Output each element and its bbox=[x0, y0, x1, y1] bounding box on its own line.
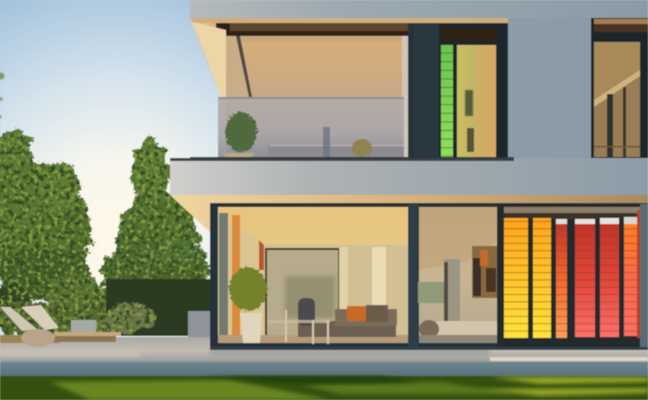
orange cushion bbox=[347, 306, 366, 321]
top light band bbox=[190, 18, 508, 23]
living room left pane bbox=[218, 207, 408, 344]
small window bbox=[418, 282, 444, 303]
room wall bbox=[226, 36, 408, 158]
dark column bbox=[408, 23, 440, 158]
tree: right slender bbox=[102, 140, 208, 284]
round ottoman bbox=[21, 329, 55, 347]
recess top bbox=[216, 23, 414, 36]
lounger back rests bbox=[0, 307, 37, 331]
upper sill bbox=[190, 157, 514, 161]
planter large bbox=[188, 311, 210, 338]
hedge bbox=[106, 279, 210, 336]
side glass door bbox=[219, 213, 228, 341]
left curtain wall bbox=[218, 212, 264, 340]
glass railing bbox=[218, 97, 404, 158]
sofa bbox=[298, 305, 397, 337]
tree: small branches top left bbox=[0, 72, 4, 119]
back wall bbox=[264, 245, 408, 337]
dining chair bbox=[268, 298, 330, 344]
middle floor slab bbox=[170, 158, 648, 195]
shutter housing bbox=[497, 204, 648, 348]
potted plant balcony bbox=[222, 112, 257, 158]
panel: yellow 2 bbox=[533, 218, 551, 338]
potted plant interior bbox=[229, 267, 267, 343]
balcony opening bbox=[190, 18, 508, 158]
upper storey soffit wedge bbox=[190, 18, 240, 100]
planter small bbox=[71, 320, 96, 333]
panel: yellow 1 bbox=[504, 218, 528, 338]
low bench bbox=[436, 321, 497, 336]
panel: orange bbox=[556, 219, 567, 338]
floor bbox=[419, 335, 497, 343]
yellow interior panel bbox=[457, 45, 496, 157]
floor bbox=[218, 335, 408, 343]
tree: large left bbox=[0, 128, 92, 300]
wall art bbox=[472, 246, 497, 298]
inner garden window bbox=[265, 248, 339, 336]
low plants bbox=[100, 305, 156, 333]
terrace front edge bbox=[0, 362, 648, 376]
panel: orange red bbox=[624, 217, 637, 336]
terrace shadow below frame bbox=[210, 347, 648, 350]
lounger bases bbox=[0, 335, 60, 343]
sun loungers bbox=[0, 305, 121, 347]
panel: red 1 bbox=[575, 219, 595, 337]
panel: red 2 bbox=[600, 218, 619, 337]
living room right pane bbox=[418, 207, 497, 343]
green louvre bbox=[441, 45, 453, 157]
window frame bbox=[439, 23, 508, 158]
faint chair and shrub behind railing bbox=[323, 127, 330, 157]
bushes bbox=[0, 274, 110, 336]
upper facade bbox=[190, 0, 648, 160]
interior bbox=[594, 42, 640, 157]
lower glazing frame bbox=[210, 203, 648, 350]
terrace deck bbox=[0, 337, 648, 376]
upper coloured window bbox=[439, 23, 508, 158]
left reveal bbox=[193, 22, 226, 98]
mullion bbox=[408, 204, 418, 347]
lower soffit bbox=[170, 195, 648, 234]
right upper window bbox=[591, 18, 648, 161]
trees and garden bbox=[0, 72, 210, 338]
grass bbox=[0, 376, 648, 400]
coloured louvre shutters bbox=[497, 204, 648, 348]
